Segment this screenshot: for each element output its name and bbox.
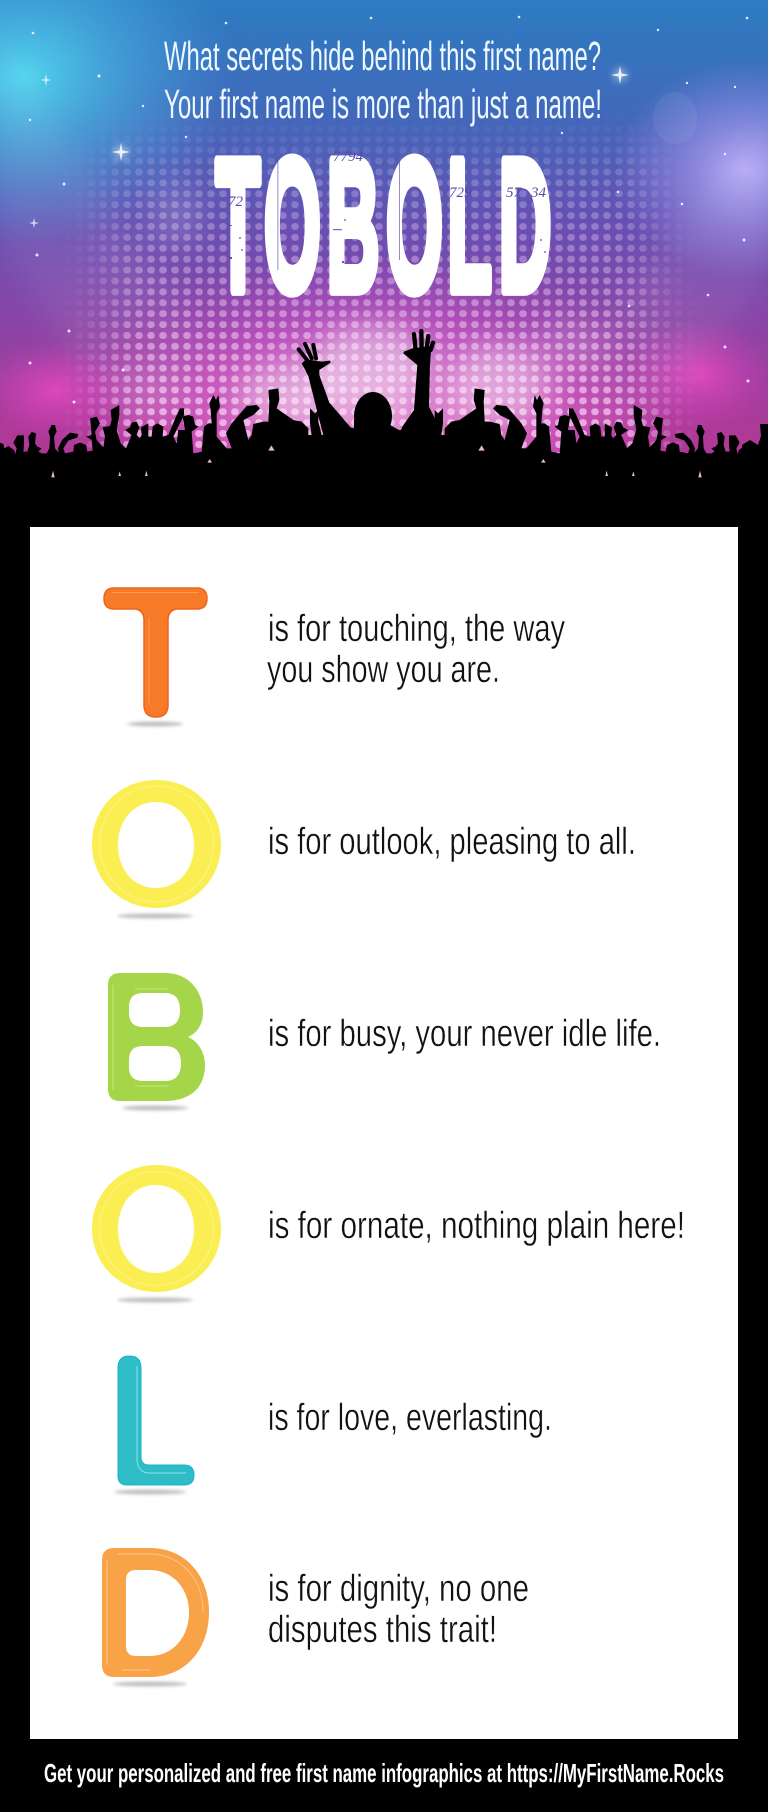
distressed marks on the title: 34 xyxy=(530,185,546,201)
row 5 text: is for love, everlasting. xyxy=(268,1397,552,1439)
distressed marks on the title xyxy=(227,149,546,270)
row 2 text: is for outlook, pleasing to all. xyxy=(268,821,636,863)
letter D icon xyxy=(102,1548,209,1686)
right edge figure xyxy=(742,424,768,530)
letter O icon xyxy=(92,780,221,918)
letter T icon xyxy=(104,588,207,726)
row 3 text: is for busy, your never idle life. xyxy=(268,1013,661,1055)
row 1 text xyxy=(267,608,565,691)
row 1 text: is for touching, the way xyxy=(268,608,565,650)
letter L icon xyxy=(114,1356,194,1494)
distressed marks on the title: 729 xyxy=(449,185,472,201)
row 6 text xyxy=(268,1568,529,1651)
letter O icon second xyxy=(92,1165,221,1302)
central raised arms and head xyxy=(299,331,441,470)
distressed marks on the title: 72 xyxy=(228,194,244,210)
row 6 text: is for dignity, no one xyxy=(268,1568,529,1610)
header concert background xyxy=(0,0,768,454)
white content panel xyxy=(30,527,738,1739)
letter B icon xyxy=(108,973,205,1110)
name title TOBOLD: TOBOLD xyxy=(216,123,551,331)
stars and sparkles xyxy=(28,16,750,403)
distressed marks on the title: 7794 xyxy=(333,149,364,165)
row 6 text: disputes this trait! xyxy=(268,1609,497,1651)
distressed marks on the title: 57 xyxy=(506,185,522,201)
crowd silhouette xyxy=(0,388,768,540)
row 1 text: you show you are. xyxy=(267,649,500,691)
header question text xyxy=(164,33,602,127)
